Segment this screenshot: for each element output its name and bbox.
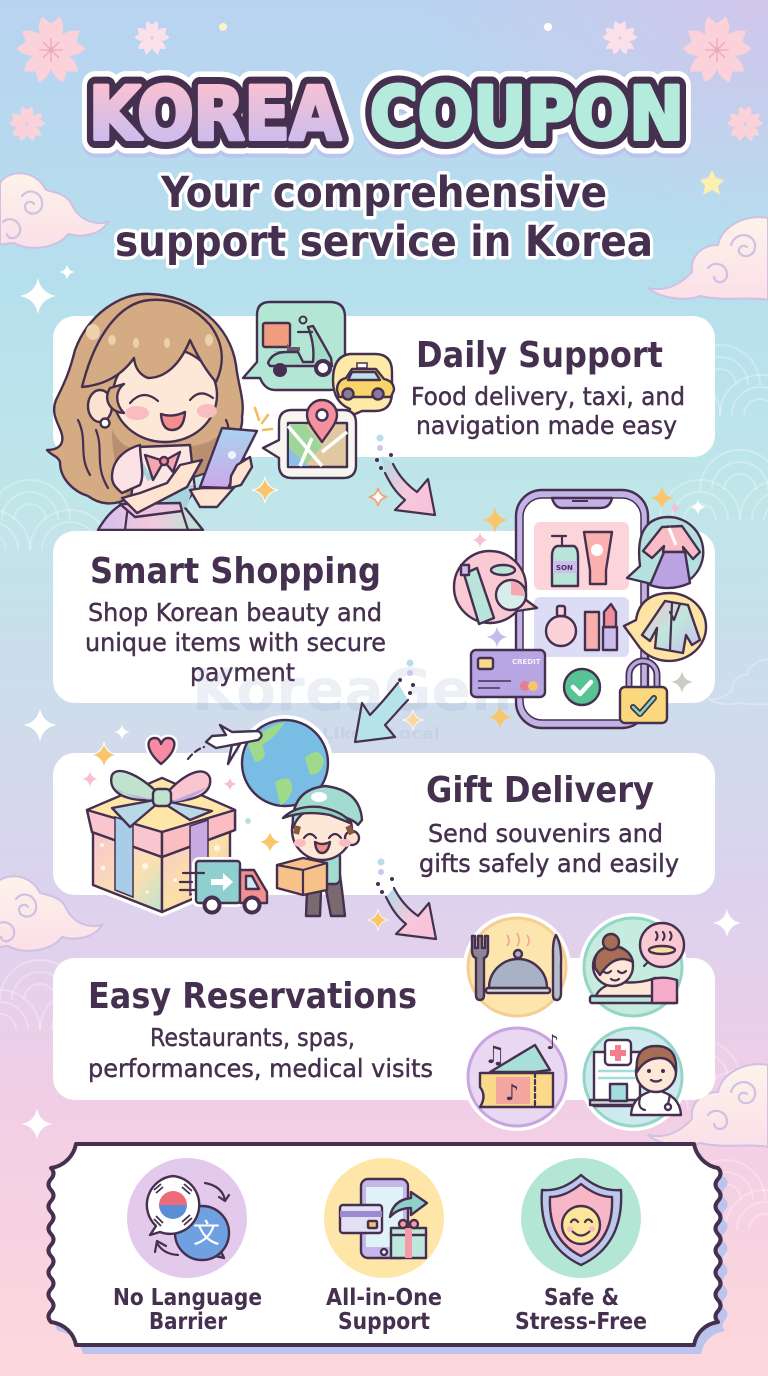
arrow: gift to reservations [368,858,436,939]
panel: daily support [53,316,715,457]
subtitle: Your comprehensive [160,168,607,218]
icon: globe and airplane [188,720,328,806]
icon: girl with phone [47,294,272,530]
description: Shop Korean beauty and [88,598,382,627]
heading: Daily Support [416,335,663,376]
label: no language barrier: Barrier [149,1307,227,1335]
description: Food delivery, taxi, and [411,382,685,411]
description: Restaurants, spas, [150,1023,355,1052]
title: Korea Coupon: COUPON [370,72,684,157]
panel: benefits ticket [48,1144,728,1354]
check badge [564,669,600,705]
icon: performance ticket: ♫ [484,1041,506,1069]
description: performances, medical visits [88,1054,433,1083]
hanbok bubble [627,517,703,588]
beauty products [546,532,617,650]
subtitle [115,168,653,267]
credit card [471,650,545,697]
title: Korea Coupon: KOREA [89,72,341,157]
description: navigation made easy [416,411,677,440]
watermark: Like a Local [322,724,440,743]
title: Korea Coupon: COUPON [370,76,684,161]
icon: medical visit [582,1026,684,1128]
heading: Gift Delivery [426,770,654,811]
icon: delivery scooter bubble [243,302,345,390]
description [419,819,679,878]
icon: restaurant [466,916,568,1018]
benefit: safe and stress-free [521,1158,641,1278]
icon: shopping phone [454,486,706,729]
wave pattern background [0,345,768,1230]
panel: smart shopping [53,531,715,703]
label: no language barrier [113,1283,262,1335]
icon: delivery truck [180,861,267,912]
benefit: no language barrier: 文 [193,1219,220,1249]
sparkles near gift [82,742,282,854]
description [85,598,386,687]
sparkles [20,264,741,1140]
label: safe and stress-free: Safe & [544,1283,619,1311]
cosmetics bubble [454,551,537,624]
subtitle: support service in Korea [115,217,653,267]
sparkles near girl [252,477,387,506]
icon: map navigation bubble [263,400,356,478]
credit card: CREDIT [512,658,541,666]
label: all-in-one support: Support [338,1307,430,1335]
cherry blossoms [8,17,764,195]
arrow: shopping to gift [355,660,423,742]
description [88,1023,433,1083]
icon: delivery person [277,786,362,916]
title: Korea Coupon [89,72,684,161]
icon: gift box [87,771,235,912]
watermark: KoreaGenie [192,656,572,724]
jacket bubble [624,593,706,661]
description: unique items with secure [85,628,386,657]
icon: performance ticket [466,1026,568,1128]
title: Korea Coupon: COUPON [370,72,684,157]
label: all-in-one support [326,1283,442,1335]
description: gifts safely and easily [419,849,679,878]
benefit: no language barrier [127,1158,247,1278]
description: payment [190,658,295,687]
description [411,382,685,440]
panel: easy reservations [53,958,715,1100]
label: no language barrier: No Language [113,1283,262,1311]
description: Send souvenirs and [428,819,663,848]
title: Korea Coupon: KOREA [89,76,341,161]
icon: heart [149,738,174,764]
title: Korea Coupon: COUPON [370,72,684,157]
beauty products: SON [556,564,573,572]
label: safe and stress-free [515,1283,647,1335]
padlock [620,661,667,723]
icon: taxi bubble [333,354,394,418]
icon: performance ticket: ♪ [546,1030,559,1054]
label: all-in-one support: All-in-One [326,1283,442,1311]
arrow: daily to shopping [375,434,435,515]
clouds [0,173,768,1147]
heading: Easy Reservations [88,976,417,1017]
label: safe and stress-free: Stress-Free [515,1307,647,1335]
panel: gift delivery [53,753,715,895]
icon: spa [582,916,684,1018]
title: Korea Coupon: KOREA [89,72,341,157]
icon: performance ticket: ♪ [505,1081,519,1106]
title: Korea Coupon: KOREA [89,72,341,157]
heading: Smart Shopping [90,551,381,592]
benefit: all-in-one support [324,1158,444,1278]
